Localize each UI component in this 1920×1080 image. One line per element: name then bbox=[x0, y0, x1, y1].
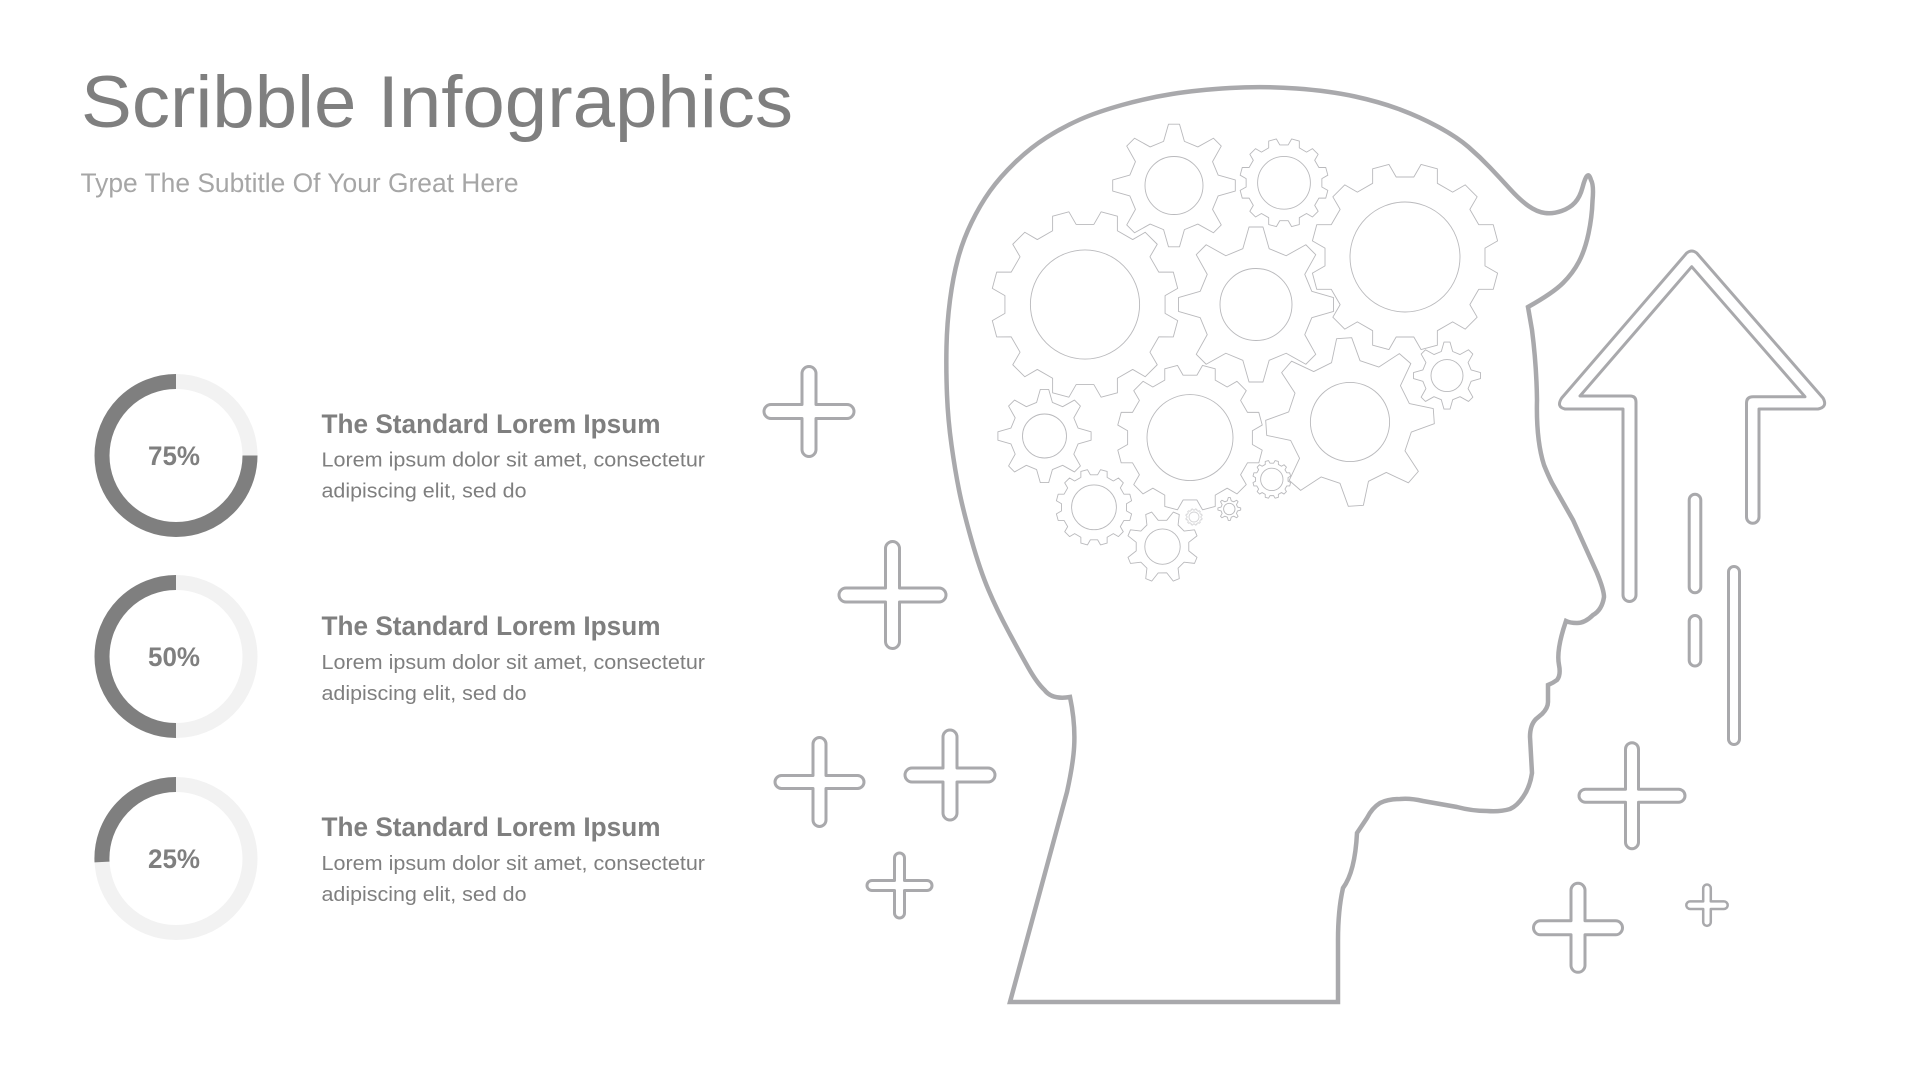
gear: top bbox=[1113, 124, 1235, 247]
gear: lower left bbox=[1056, 470, 1132, 545]
speed dash: centre long bbox=[1689, 494, 1701, 593]
head silhouette outline bbox=[946, 87, 1604, 1002]
gear: bottom bbox=[1115, 500, 1210, 594]
heading: item 3: The Standard Lorem Ipsum bbox=[322, 812, 660, 842]
arrow: upward outlined bbox=[1559, 251, 1825, 602]
title: Scribble Infographics bbox=[81, 62, 793, 143]
gear: large top right bbox=[1312, 164, 1498, 350]
gear: tiny right bbox=[1253, 461, 1291, 498]
panel: 50% item bbox=[102, 582, 705, 730]
gear: centre bbox=[1178, 227, 1334, 382]
plus icon 6 bbox=[1579, 743, 1685, 849]
plus icon 4 bbox=[905, 730, 995, 820]
text block: item 2: Lorem ipsum dolor sit amet, consectetur bbox=[322, 651, 705, 674]
plus icon 2 bbox=[839, 542, 946, 648]
speed dash: centre short bbox=[1689, 616, 1701, 666]
donut chart: 25%: 25% bbox=[148, 844, 200, 874]
text block: item 1 bbox=[322, 448, 705, 502]
text block: item 2 bbox=[322, 651, 705, 705]
speed dash: right long bbox=[1728, 566, 1740, 744]
gear: lower right bbox=[1260, 332, 1440, 512]
plus icon 8 bbox=[1686, 885, 1728, 926]
subtitle: Type The Subtitle Of Your Great Here bbox=[80, 168, 518, 198]
gear: large left bbox=[992, 212, 1178, 397]
gear: left small bbox=[998, 389, 1091, 483]
gear: lower centre bbox=[1118, 365, 1262, 510]
panel: 25% item bbox=[102, 784, 705, 932]
text block: item 1: Lorem ipsum dolor sit amet, consectetur bbox=[322, 448, 705, 472]
gear: top small bbox=[1240, 139, 1328, 227]
donut chart: 50%: 50% bbox=[148, 642, 200, 672]
panel: 75% item bbox=[102, 382, 705, 530]
gears cluster bbox=[992, 124, 1498, 594]
text block: item 3 bbox=[322, 852, 705, 906]
plus icon 1 bbox=[764, 366, 854, 456]
gear: right small bbox=[1414, 342, 1480, 409]
text block: item 2: adipiscing elit, sed do bbox=[322, 682, 526, 705]
heading: item 2: The Standard Lorem Ipsum bbox=[322, 611, 660, 641]
donut chart: 75%: 75% bbox=[148, 441, 200, 471]
text block: item 3: adipiscing elit, sed do bbox=[322, 883, 526, 906]
plus icon 3 bbox=[775, 738, 864, 827]
donut chart: 75% bbox=[102, 382, 250, 530]
gear: tiny left bbox=[1186, 509, 1202, 525]
text block: item 1: adipiscing elit, sed do bbox=[322, 480, 526, 502]
donut chart: 50% bbox=[102, 582, 250, 730]
heading: item 1: The Standard Lorem Ipsum bbox=[322, 409, 660, 439]
donut chart: 25% bbox=[102, 784, 250, 932]
plus icon 5 bbox=[867, 853, 932, 918]
text block: item 3: Lorem ipsum dolor sit amet, consectetur bbox=[322, 852, 705, 875]
gear: tiny centre bbox=[1218, 498, 1241, 520]
plus icon 7 bbox=[1534, 883, 1622, 972]
